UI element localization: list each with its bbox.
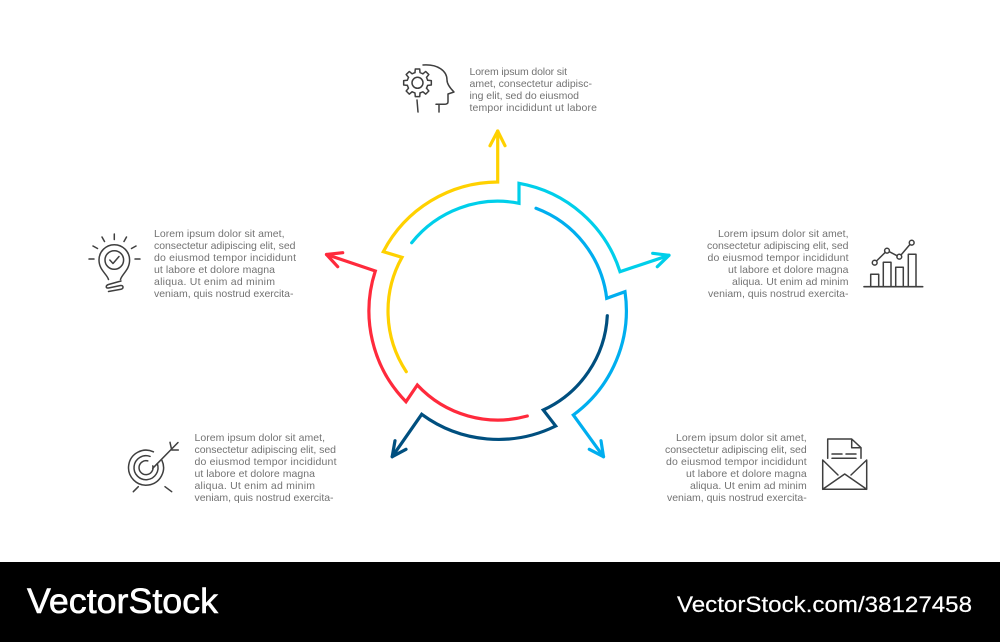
text: left (154, 228, 296, 300)
icon: envelope with document (823, 439, 867, 489)
text: left: consectetur adipiscing elit, sed (154, 240, 296, 252)
text: left: aliqua. Ut enim ad minim (154, 276, 275, 288)
text: right: consectetur adipiscing elit, sed (707, 240, 849, 252)
text: right: do eiusmod tempor incididunt (708, 252, 849, 264)
text: left: do eiusmod tempor incididunt (154, 252, 296, 264)
text: top (470, 66, 597, 114)
text: right: ut labore et dolore magna (728, 264, 849, 276)
arrow: yellow (383, 131, 505, 372)
arrow: blue (536, 208, 626, 457)
text: bottom left: aliqua. Ut enim ad minim (194, 480, 315, 492)
text: bottom left: do eiusmod tempor incididunt (194, 456, 337, 468)
text: bottom right: ut labore et dolore magna (686, 468, 807, 480)
text: bottom right: do eiusmod tempor incididunt (666, 456, 807, 468)
text: left: veniam, quis nostrud exercita- (154, 288, 294, 300)
footer logo: VectorStock (27, 582, 219, 621)
icon: light bulb (89, 234, 140, 292)
arrow: cyan (412, 183, 669, 272)
arrow: navy (392, 316, 607, 457)
text: bottom left: ut labore et dolore magna (194, 468, 315, 480)
text: top: Lorem ipsum dolor sit (470, 66, 567, 78)
footer bar (0, 562, 1000, 642)
text: bottom left (194, 432, 337, 504)
text: top: amet, consectetur adipisc- (470, 78, 592, 90)
footer url: VectorStock.com/38127458 (677, 592, 972, 617)
text: right (707, 228, 849, 300)
text: bottom right: consectetur adipiscing elit, sed (665, 444, 807, 456)
text: bottom right (665, 432, 807, 504)
text: right: aliqua. Ut enim ad minim (732, 276, 849, 288)
text: top: ing elit, sed do eiusmod (470, 90, 579, 102)
text: bottom right: veniam, quis nostrud exercita- (667, 492, 807, 504)
text: bottom right: Lorem ipsum dolor sit amet, (676, 432, 807, 444)
text: right: veniam, quis nostrud exercita- (708, 288, 849, 300)
text: top: tempor incididunt ut labore (470, 102, 597, 114)
text: right: Lorem ipsum dolor sit amet, (718, 228, 848, 240)
text: bottom left: Lorem ipsum dolor sit amet, (194, 432, 325, 444)
icon: bar chart (864, 240, 923, 287)
text: bottom right: aliqua. Ut enim ad minim (690, 480, 807, 492)
text: left: Lorem ipsum dolor sit amet, (154, 228, 284, 240)
text: left: ut labore et dolore magna (154, 264, 275, 276)
arrow: red (326, 253, 527, 420)
cycle diagram (326, 131, 669, 457)
text: bottom left: veniam, quis nostrud exercita- (194, 492, 334, 504)
icon: head with gear (404, 65, 454, 112)
icon: target (129, 442, 178, 492)
text: bottom left: consectetur adipiscing elit, sed (194, 444, 336, 456)
